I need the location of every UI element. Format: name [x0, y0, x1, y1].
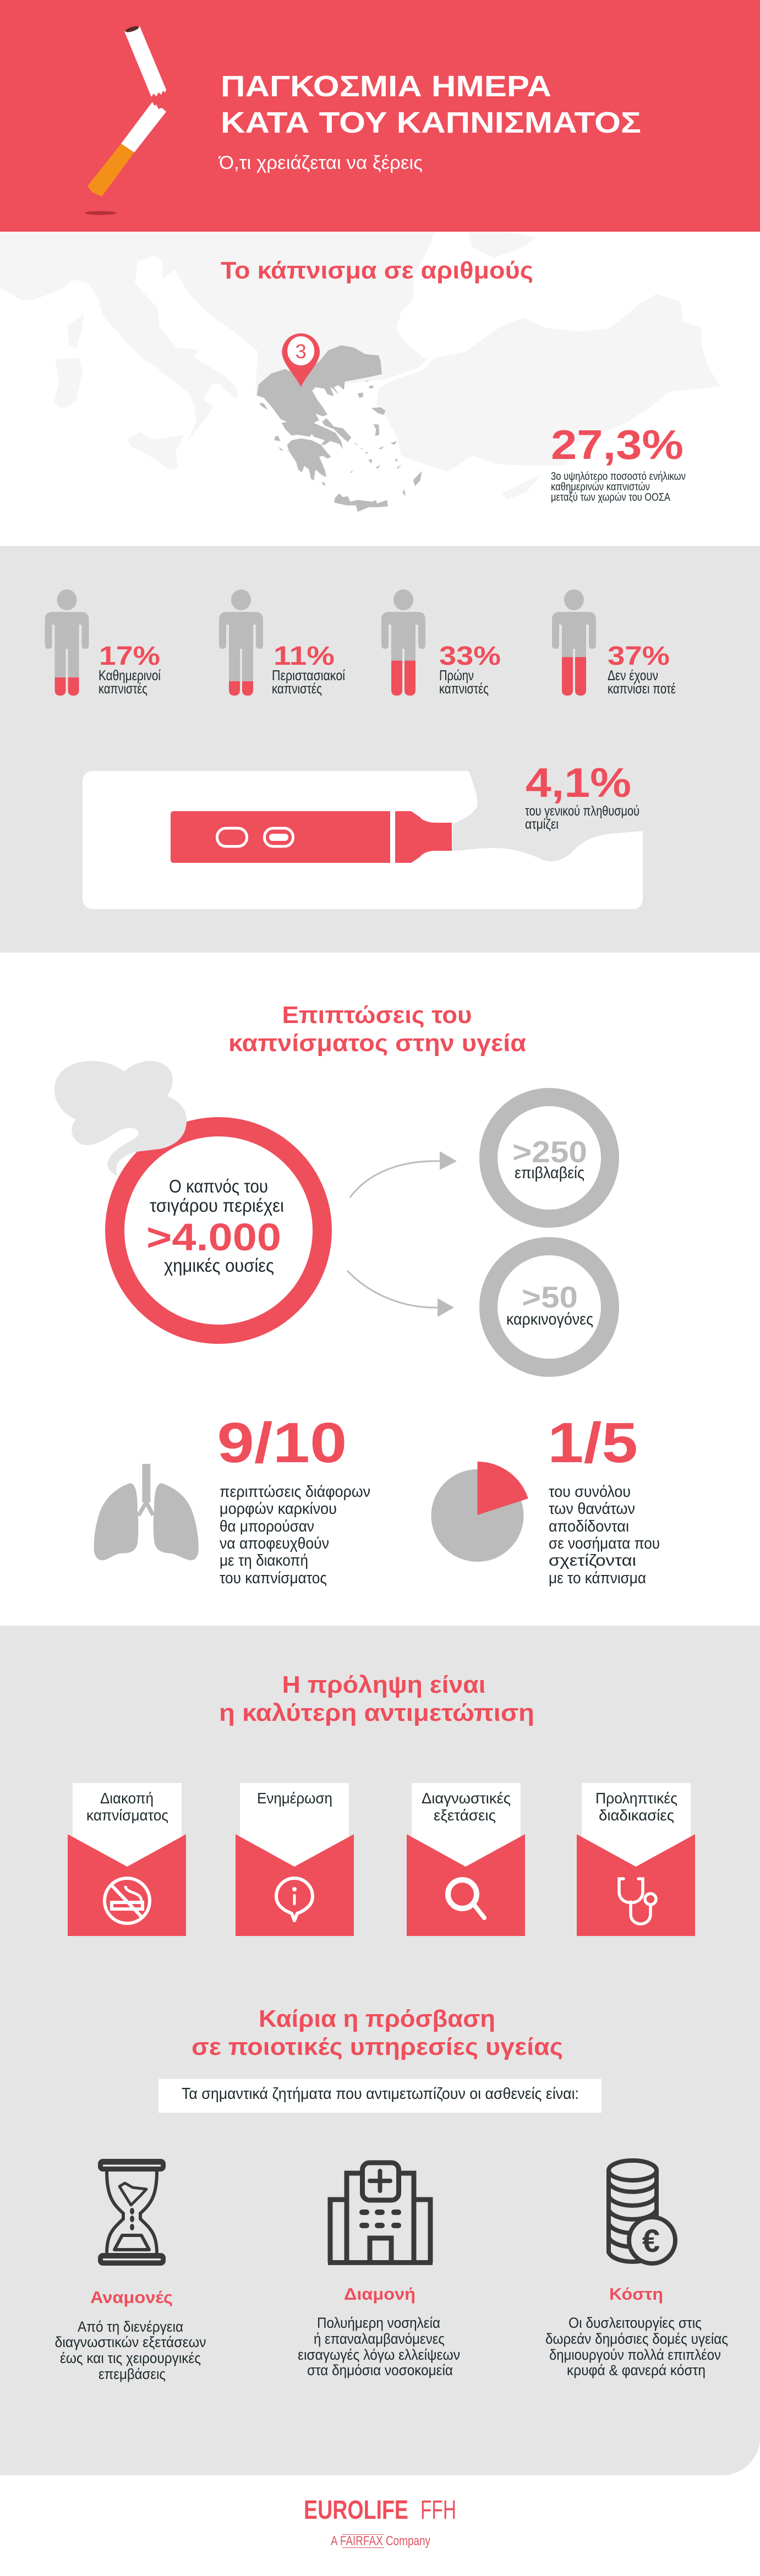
stat: 1/5: 1/5 — [548, 1411, 638, 1474]
column: waits: Από τη διενέργεια — [78, 2318, 183, 2335]
column: hospital stay: στα δημόσια νοσοκομεία — [307, 2362, 453, 2378]
card: awareness: Ενημέρωση — [257, 1790, 332, 1807]
column: cost: κρυφά & φανερά κόστη — [567, 2362, 706, 2378]
description: 9 in 10: να αποφευχθούν — [220, 1535, 329, 1552]
icon: coin stack with euro: € — [642, 2223, 660, 2259]
card: diagnostic tests: εξετάσεις — [434, 1807, 496, 1824]
panel: health effects — [54, 1002, 660, 1587]
description: 1 in 5: του συνόλου — [549, 1483, 631, 1501]
ring text: τσιγάρου περιέχει — [150, 1195, 284, 1216]
map: surrounding land — [0, 232, 720, 500]
heading: smoking in numbers: Το κάπνισμα σε αριθμούς — [221, 257, 533, 284]
person: 37%: καπνίσει ποτέ — [608, 680, 676, 697]
card: quit smoking: καπνίσματος — [86, 1807, 168, 1824]
ring: over 250 harmful — [489, 1097, 610, 1218]
card: quit smoking — [68, 1783, 186, 1936]
icon: stethoscope — [619, 1879, 656, 1924]
description: 9 in 10 — [220, 1483, 370, 1587]
column: cost: Κόστη — [609, 2284, 663, 2304]
heading: access to care: Καίρια η πρόσβαση — [259, 2005, 495, 2032]
person: 33%: καπνιστές — [439, 680, 489, 697]
column: waits: διαγνωστικών εξετάσεων — [55, 2334, 206, 2350]
map: Greece — [257, 345, 422, 512]
description: 9 in 10: με τη διακοπή — [220, 1552, 308, 1569]
description: 9 in 10: μορφών καρκίνου — [220, 1500, 337, 1518]
person: 33%: 33% — [439, 642, 501, 671]
ring: over 250 harmful: >250 — [512, 1135, 587, 1169]
column: cost: Οι δυσλειτουργίες στις — [568, 2315, 702, 2331]
title: ΠΑΓΚΟΣΜΙΑ ΗΜΕΡΑ — [221, 70, 551, 103]
stat: 4,1%: 4,1% — [526, 759, 631, 806]
icon: hourglass — [98, 2159, 166, 2266]
vape description — [525, 803, 639, 832]
card: preventive procedures: διαδικασίες — [599, 1807, 674, 1824]
arrow: to carcinogens — [347, 1271, 454, 1317]
callout: patient issues — [158, 2079, 602, 2113]
logo: Eurolife FFH — [304, 2496, 456, 2548]
subtitle: Ό,τι χρειάζεται να ξέρεις — [218, 152, 423, 173]
ring text: χημικές ουσίες — [164, 1255, 274, 1276]
column: waits: επεμβάσεις — [99, 2366, 166, 2382]
column: hospital stay — [298, 2284, 460, 2378]
heading: access to care — [192, 2005, 563, 2060]
column: hospital stay: Πολυήμερη νοσηλεία — [317, 2315, 440, 2331]
person: 11%: καπνιστές — [272, 680, 322, 697]
column: cost: δημιουργούν πολλά επιπλέον — [549, 2347, 721, 2363]
heading: access to care: σε ποιοτικές υπηρεσίες υγείας — [192, 2033, 563, 2060]
description: 9 in 10: του καπνίσματος — [220, 1569, 327, 1587]
description: 9 in 10: περιπτώσεις διάφορων — [220, 1483, 370, 1501]
ring: over 50 carcinogens: >50 — [522, 1280, 578, 1314]
person: 33%: Πρώην — [439, 667, 474, 683]
column: waits — [55, 2288, 206, 2382]
person: 37%: Δεν έχουν — [608, 667, 658, 683]
panel: vape vapour cloud — [83, 771, 643, 909]
heading: prevention: Η πρόληψη είναι — [282, 1671, 485, 1698]
chart: pie one fifth — [431, 1462, 528, 1562]
panel: map of Greece and neighbours — [0, 232, 720, 512]
card: quit smoking: Διακοπή — [100, 1790, 154, 1807]
ring text: >4.000 — [146, 1216, 281, 1259]
stat: 27,3%: 27,3% — [551, 422, 684, 468]
smoke cloud — [54, 1061, 187, 1176]
person: 17%: 17% — [99, 642, 160, 671]
stat description: 3ο υψηλότερο ποσοστό ενήλικων — [551, 471, 686, 483]
heading: prevention — [219, 1671, 534, 1726]
description: 1 in 5: αποδίδονται — [549, 1518, 629, 1535]
logo: Eurolife FFH: FFH — [420, 2496, 456, 2525]
heading: health effects: καπνίσματος στην υγεία — [228, 1030, 526, 1057]
ring: over 50 carcinogens: καρκινογόνες — [506, 1310, 593, 1328]
card: preventive procedures — [577, 1783, 695, 1936]
description: 1 in 5: των θανάτων — [549, 1500, 635, 1518]
description: 1 in 5: με το κάπνισμα — [549, 1569, 646, 1587]
description: 1 in 5: σε νοσήματα που — [549, 1535, 660, 1552]
column: cost — [545, 2284, 728, 2378]
panel: smoker statistics — [0, 546, 760, 953]
column: waits: Αναμονές — [90, 2288, 173, 2307]
title — [221, 70, 641, 139]
ring text: Ο καπνός του — [169, 1176, 268, 1196]
person: 11% — [219, 589, 345, 697]
stat description: καθημερινών καπνιστών — [551, 481, 650, 493]
icon: coin stack with euro — [609, 2161, 675, 2263]
icon: info bubble — [276, 1878, 313, 1921]
person: 17%: Καθημερινοί — [99, 667, 161, 683]
title: ΚΑΤΑ ΤΟΥ ΚΑΠΝΙΣΜΑΤΟΣ — [221, 106, 641, 139]
ring text — [146, 1176, 284, 1276]
card: diagnostic tests — [407, 1783, 525, 1936]
column: hospital stay: Διαμονή — [344, 2284, 415, 2304]
description: 9 in 10: θα μπορούσαν — [220, 1518, 314, 1535]
icon: map pin 3: 3 — [296, 340, 307, 363]
callout: patient issues: Τα σημαντικά ζητήματα που αντιμετωπίζουν οι ασθενείς είναι: — [182, 2085, 579, 2103]
stat description — [551, 471, 686, 504]
vape description: ατμίζει — [525, 817, 559, 832]
heading: health effects: Επιπτώσεις του — [282, 1002, 472, 1029]
column: hospital stay: ή επαναλαμβανόμενες — [314, 2331, 445, 2347]
icon: lungs — [94, 1464, 199, 1560]
person: 33% — [381, 589, 501, 697]
person: 37% — [552, 589, 676, 697]
description: 1 in 5 — [549, 1483, 660, 1587]
card: awareness — [236, 1783, 354, 1936]
ring: 4000 chemicals — [114, 1127, 322, 1334]
person: 17%: καπνιστές — [99, 680, 147, 697]
vape description: του γενικού πληθυσμού — [525, 803, 639, 819]
person: 17% — [45, 589, 161, 697]
card: preventive procedures: Προληπτικές — [595, 1790, 677, 1807]
logo: Eurolife FFH: EUROLIFE — [304, 2496, 408, 2525]
panel: header — [0, 0, 760, 232]
panel: prevention and access — [0, 1626, 760, 2475]
icon: broken cigarette — [85, 25, 166, 215]
heading: health effects — [228, 1002, 526, 1057]
icon: magnifier — [448, 1880, 484, 1918]
description: 1 in 5: σχετίζονται — [549, 1552, 636, 1569]
column: cost: δωρεάν δημόσιες δομές υγείας — [545, 2331, 728, 2347]
icon: map pin 3 — [282, 333, 320, 387]
ring: over 250 harmful: επιβλαβείς — [515, 1164, 584, 1182]
heading: prevention: η καλύτερη αντιμετώπιση — [219, 1699, 534, 1726]
stat description: μεταξύ των χωρών του ΟΟΣΑ — [551, 491, 671, 504]
logo: Eurolife FFH: A FAIRFAX Company — [331, 2534, 430, 2548]
column: waits: έως και τις χειρουργικές — [60, 2350, 201, 2366]
column: hospital stay: εισαγωγές λόγω ελλείψεων — [298, 2347, 460, 2363]
person: 37%: 37% — [608, 642, 670, 671]
card: diagnostic tests: Διαγνωστικές — [422, 1790, 511, 1807]
ring: over 50 carcinogens — [489, 1246, 610, 1368]
icon: vape device — [171, 811, 452, 863]
icon: hospital — [328, 2163, 433, 2263]
arrow: to harmful — [350, 1151, 457, 1197]
person: 11%: Περιστασιακοί — [272, 667, 345, 683]
icon: no smoking — [105, 1878, 150, 1923]
person: 11%: 11% — [274, 642, 335, 671]
stat: 9/10: 9/10 — [217, 1411, 347, 1474]
